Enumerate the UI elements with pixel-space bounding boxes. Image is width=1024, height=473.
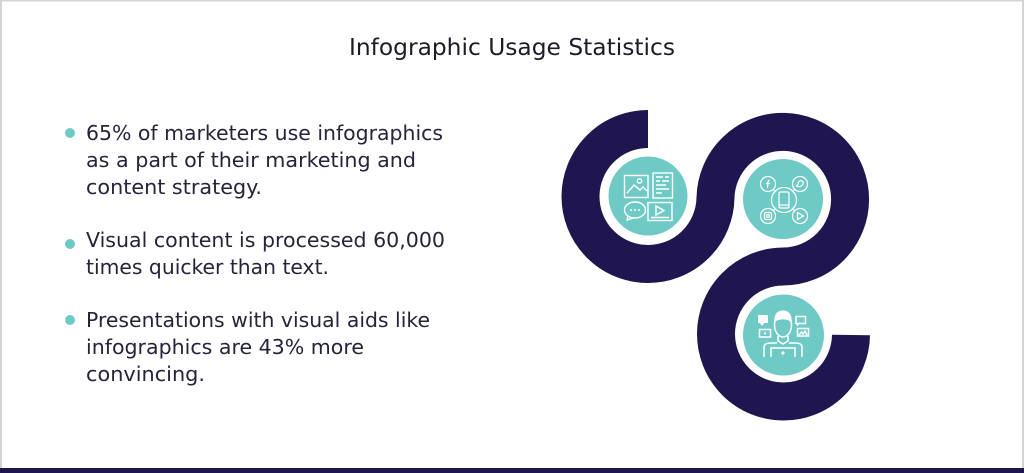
serpentine ribbon [581,129,851,401]
bullet point: visual content: Visual content is processed 60,000 [86,228,445,252]
icon: person at laptop [743,294,824,376]
icon: social media network [743,159,823,239]
chart: connected ribbon diagram [581,129,851,401]
bullet point: presentations: Presentations with visual aids like [86,308,430,332]
icon: content formats [608,156,688,236]
bullet point: visual content [65,228,445,279]
text block: statistics list [65,121,445,386]
bullet point: presentations [65,308,430,386]
hair and message fills [758,310,792,355]
bullet point: presentations: infographics are 43% more [86,335,364,359]
bullet point: presentations: convincing. [86,362,205,386]
title: Infographic Usage Statistics [349,33,675,61]
footer bar [0,468,1024,473]
bullet point: marketers [65,121,443,199]
bullet point: marketers: 65% of marketers use infographics [86,121,443,145]
bullet point: marketers: content strategy. [86,175,262,199]
bullet point: marketers: as a part of their marketing and [86,148,416,172]
bullet point: visual content: times quicker than text. [86,255,329,279]
